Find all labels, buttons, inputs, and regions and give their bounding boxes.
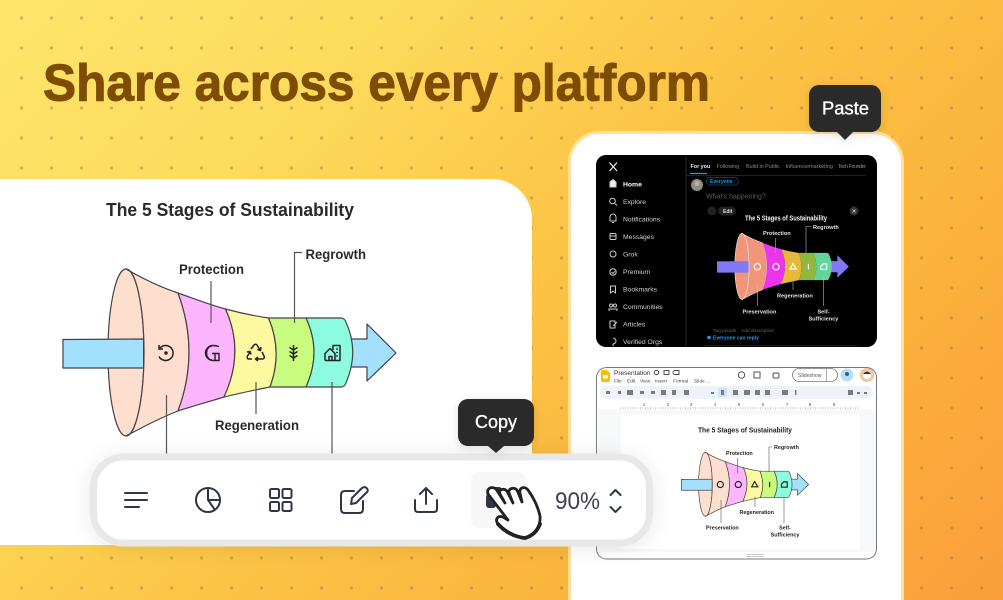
icon: regeneration xyxy=(247,344,264,361)
panel: slides editor xyxy=(596,368,876,559)
funnel diagram xyxy=(63,269,396,436)
ruler: 7 xyxy=(786,402,789,407)
composer controls: Tag people xyxy=(713,328,737,334)
app header: Slide ... xyxy=(694,378,710,384)
icon: text lines xyxy=(125,493,147,507)
ruler: 2 xyxy=(667,402,670,407)
dark labels: Protection xyxy=(763,231,791,237)
composer controls: Edit xyxy=(723,209,733,215)
panel: X post composer xyxy=(596,155,877,347)
light labels: Sufficiency xyxy=(771,532,799,538)
app header: Format xyxy=(673,378,689,384)
ruler: 3 xyxy=(690,402,693,407)
app header: Presentation xyxy=(614,370,651,377)
leader lines xyxy=(166,382,332,456)
dark labels: Self- xyxy=(817,310,830,316)
ruler xyxy=(620,402,860,408)
icon: grid xyxy=(270,489,292,511)
toolbar xyxy=(94,457,650,543)
tooltip: Paste: Paste xyxy=(822,98,869,118)
label: Protection xyxy=(179,262,244,323)
dark labels: Regeneration xyxy=(777,294,813,300)
ruler: 5 xyxy=(738,402,741,407)
dark labels: Sufficiency xyxy=(809,316,839,322)
infographic heading: The 5 Stages of Sustainability xyxy=(106,200,354,220)
dark labels: Regrowth xyxy=(813,225,839,231)
light labels: Regrowth xyxy=(774,445,799,451)
timeline tabs: For you xyxy=(690,164,710,170)
composer controls: Add description xyxy=(741,328,774,334)
sidebar navigation: Notifications xyxy=(623,216,661,224)
dark funnel xyxy=(717,233,849,300)
tooltip: Copy xyxy=(458,399,534,453)
icon: preservation xyxy=(159,345,173,360)
timeline tabs: Influencermarketing xyxy=(786,164,833,170)
sidebar navigation: Verified Orgs xyxy=(623,339,663,346)
sidebar navigation xyxy=(609,156,686,346)
panel: source infographic card xyxy=(0,179,532,545)
label: Protection: Protection xyxy=(179,262,244,277)
ruler: 6 xyxy=(762,402,765,407)
icon: self-sufficiency xyxy=(325,346,340,360)
light labels xyxy=(706,445,799,538)
timeline tabs: Tech Founder xyxy=(838,164,866,170)
timeline tabs xyxy=(687,164,866,176)
icon: share xyxy=(415,488,437,512)
dark infographic: The 5 Stages of Sustainability xyxy=(745,216,827,222)
icon: zoom stepper xyxy=(610,490,620,512)
timeline tabs: Following xyxy=(716,164,739,170)
editing toolbar xyxy=(600,386,873,399)
ruler: 1 xyxy=(643,402,646,407)
composer controls: Everyone can reply xyxy=(713,336,759,342)
icon: pie chart xyxy=(196,488,220,512)
composer controls: What's happening? xyxy=(706,194,766,200)
light labels: Protection xyxy=(726,451,753,457)
app header: View xyxy=(640,378,651,384)
panel: destination card xyxy=(570,132,902,600)
copy button hover xyxy=(471,472,526,528)
app header: File xyxy=(614,378,622,384)
sidebar navigation: Explore xyxy=(623,199,646,206)
label: Regrowth: Regrowth xyxy=(306,247,366,262)
ruler: 9 xyxy=(833,402,836,407)
sidebar navigation: Bookmarks xyxy=(623,286,658,294)
sidebar navigation: Home xyxy=(623,182,642,188)
timeline tabs: Build in Public xyxy=(746,164,780,170)
slide canvas: The 5 Stages of Sustainability xyxy=(698,428,792,434)
sidebar navigation: Communities xyxy=(623,304,663,311)
slide canvas xyxy=(598,409,875,556)
sidebar navigation: Articles xyxy=(623,322,646,328)
icon: copy xyxy=(486,487,502,508)
app header: Slideshow xyxy=(798,373,822,379)
tooltip: Copy: Copy xyxy=(475,412,517,432)
light funnel xyxy=(681,452,809,516)
icon: regrowth xyxy=(290,345,298,361)
tooltip: Paste xyxy=(809,85,881,140)
label: Regeneration xyxy=(215,382,299,433)
dark labels: Preservation xyxy=(742,310,777,316)
dark infographic xyxy=(717,216,849,322)
ruler: 4 xyxy=(714,402,717,407)
icon: pointing hand cursor xyxy=(488,488,540,538)
app header: Insert xyxy=(655,378,668,384)
dark labels xyxy=(742,225,839,322)
composer controls xyxy=(691,178,858,346)
sidebar navigation: Grok xyxy=(623,252,638,258)
label: Regrowth xyxy=(294,247,366,323)
ruler: 8 xyxy=(809,402,812,407)
light labels: Preservation xyxy=(706,526,739,532)
title: Share across every platform xyxy=(43,54,710,112)
icon: protection xyxy=(206,346,219,360)
icon: edit xyxy=(341,487,368,513)
light labels: Regeneration xyxy=(740,510,774,516)
composer controls: Everyone xyxy=(710,179,733,185)
app header: Edit xyxy=(627,378,636,384)
sidebar navigation: Premium xyxy=(623,269,651,276)
app header xyxy=(601,368,874,384)
label: Regeneration: Regeneration xyxy=(215,418,299,433)
light labels: Self- xyxy=(779,526,791,532)
sidebar navigation: Messages xyxy=(623,234,655,241)
zoom value: 90% xyxy=(555,488,600,515)
